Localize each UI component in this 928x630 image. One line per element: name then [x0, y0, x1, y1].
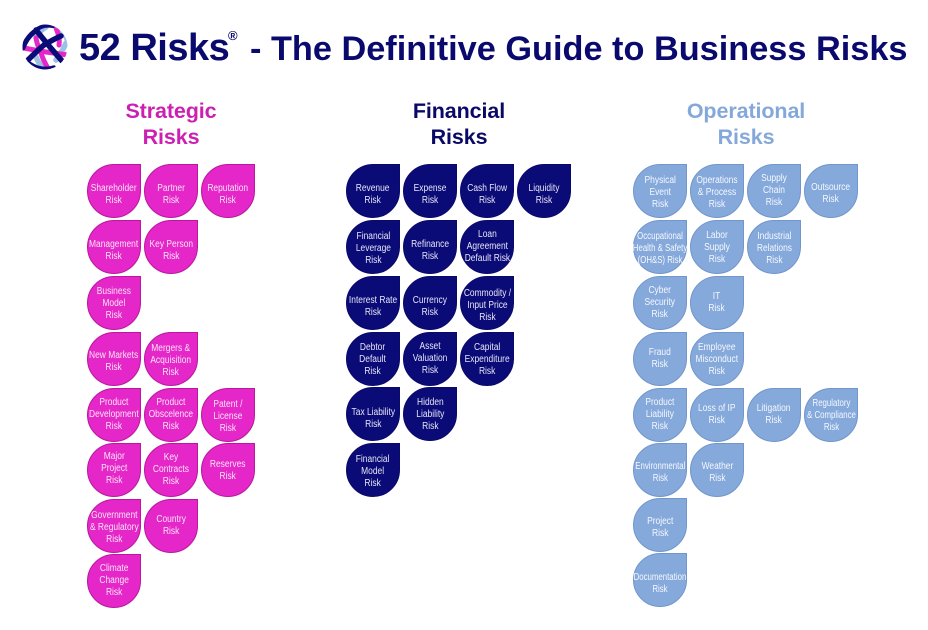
risk: Labor Supply: Labor: [706, 230, 728, 241]
risk: Cyber Security: Cyber: [649, 285, 671, 296]
risk: Loan Agreement Default: Loan: [478, 229, 496, 240]
risk: Commodity / Input Price: [460, 276, 514, 330]
risk: Reputation: Risk: [220, 195, 236, 206]
risk: Financial Leverage: [346, 220, 400, 274]
heading: financial risks: Financial: [413, 99, 505, 123]
risk: Debtor Default: Default: [360, 354, 386, 365]
risk: Project: [633, 498, 687, 552]
panel: strategic risks: [87, 99, 255, 608]
risk: Supply Chain: [747, 164, 801, 218]
risk: Occupational Health and Safety: Occupational: [637, 231, 683, 242]
risk: Employee Misconduct: [690, 332, 744, 386]
heading: strategic risks: Risks: [143, 125, 199, 149]
risk: Patent / License: Patent /: [213, 399, 243, 410]
risk: Loss of IP: Risk: [709, 415, 725, 426]
risk: Industrial Relations: [747, 220, 801, 274]
risk: Product Obscelence: Risk: [163, 421, 179, 432]
risk: Cash Flow: [460, 164, 514, 218]
risk: Liquidity: Risk: [536, 195, 552, 206]
risk: Currency: Risk: [422, 307, 438, 318]
risk: IT: [690, 276, 744, 330]
risk: Loss of IP: [690, 388, 744, 442]
risk: Asset Valuation: Valuation: [413, 353, 447, 364]
risk: Regulatory and Compliance: & Compliance: [807, 410, 855, 421]
risk: Climate Change: Risk: [106, 587, 122, 598]
risk: Product Obscelence: Obscelence: [149, 409, 193, 420]
risk: IT: IT: [713, 291, 721, 302]
risk: Key Contracts: Key: [164, 452, 178, 463]
risk: Revenue: Revenue: [356, 183, 390, 194]
risk: Fraud: [633, 332, 687, 386]
risk: Hidden Liability: Hidden: [417, 397, 443, 408]
risk: Operations and Process: [690, 164, 744, 218]
risk: Product Development: Product: [99, 397, 129, 408]
risk: New Markets: [87, 332, 141, 386]
risk: Financial Leverage: Financial: [356, 231, 390, 242]
risk: Physical Event: Event: [649, 187, 671, 198]
risk: Management: Risk: [106, 251, 122, 262]
risk: Business Model: [87, 276, 141, 330]
risk: Interest Rate: Interest Rate: [349, 295, 397, 306]
risk: Outsource: Risk: [823, 194, 839, 205]
risk: Expense: [403, 164, 457, 218]
risk: Partner: Risk: [163, 195, 179, 206]
risk: Product Liability: Liability: [646, 409, 674, 420]
risk: Labor Supply: Risk: [709, 254, 725, 265]
title: ®: [228, 28, 238, 43]
risk: Loss of IP: Loss of IP: [698, 403, 736, 414]
risk: Asset Valuation: [403, 332, 457, 386]
risk: Physical Event: Risk: [652, 199, 668, 210]
risk: Capital Expenditure: Risk: [479, 366, 495, 377]
risk: Environmental: Environmental: [635, 461, 685, 472]
risk: Litigation: Litigation: [757, 403, 791, 414]
logo: 52 Risks globe: [22, 24, 68, 70]
risk: Environmental: Risk: [652, 473, 668, 484]
risk: Commodity / Input Price: Commodity /: [463, 288, 511, 299]
risk: Reputation: [201, 164, 255, 218]
risk: Commodity / Input Price: Input Price: [467, 300, 507, 311]
risk: Liquidity: Liquidity: [529, 183, 559, 194]
risk: Key Person: Key Person: [149, 239, 193, 250]
risk: Industrial Relations: Risk: [766, 255, 782, 266]
risk: Management: Management: [89, 239, 139, 250]
panel: financial risks: [346, 99, 571, 497]
risk: Cyber Security: [633, 276, 687, 330]
risk: Product Obscelence: Product: [156, 397, 186, 408]
heading: strategic risks: Strategic: [125, 99, 217, 123]
risk: Refinance: [403, 220, 457, 274]
risk: Currency: [403, 276, 457, 330]
risk: Government and Regulatory: [87, 499, 141, 553]
risk: IT: Risk: [709, 303, 725, 314]
heading: operational risks: [687, 99, 805, 149]
risk: Country: Country: [156, 514, 186, 525]
risk: Operations and Process: Operations: [696, 175, 738, 186]
risk: Outsource: [804, 164, 858, 218]
risk: Shareholder: Shareholder: [91, 183, 137, 194]
risk: Debtor Default: [346, 332, 400, 386]
risk: Capital Expenditure: Expenditure: [465, 354, 509, 365]
heading: financial risks: [413, 99, 505, 149]
risk: Mergers and Acquisition: Risk: [163, 367, 179, 378]
risk: Mergers and Acquisition: [144, 332, 198, 386]
risk: Government and Regulatory: Government: [91, 510, 137, 521]
risk: Project: Risk: [652, 528, 668, 539]
risk: Capital Expenditure: Capital: [474, 342, 500, 353]
risk: Asset Valuation: Risk: [422, 365, 438, 376]
risk: Key Contracts: Risk: [163, 476, 179, 487]
risk: Product Development: [87, 388, 141, 442]
risk: Reserves: [201, 443, 255, 497]
risk: Business Model: Model: [103, 298, 125, 309]
heading: financial risks: Risks: [431, 125, 487, 149]
risk: Key Person: [144, 220, 198, 274]
risk: Cash Flow: Cash Flow: [467, 183, 507, 194]
risk: Product Development: Development: [89, 409, 139, 420]
risk: Government and Regulatory: Risk: [106, 534, 122, 545]
risk: Financial Model: Risk: [365, 478, 381, 489]
risk: Business Model: Risk: [106, 310, 122, 321]
risk: Fraud: Fraud: [649, 347, 671, 358]
risk: Interest Rate: Risk: [365, 307, 381, 318]
risk: Supply Chain: Chain: [763, 185, 785, 196]
risk: Commodity / Input Price: Risk: [479, 312, 495, 323]
risk: Debtor Default: Debtor: [360, 342, 386, 353]
risk: Occupational Health and Safety: (OH&S) Risk: [638, 255, 682, 266]
risk: Fraud: Risk: [652, 359, 668, 370]
risk: Operations and Process: & Process: [698, 187, 736, 198]
risk: Supply Chain: Risk: [766, 197, 782, 208]
risk: Major Project: [87, 443, 141, 497]
risk: Liquidity: [517, 164, 571, 218]
risk: Weather: Risk: [709, 473, 725, 484]
risk: Cash Flow: Risk: [479, 195, 495, 206]
risk: Employee Misconduct: Risk: [709, 366, 725, 377]
risk: Environmental: [633, 443, 687, 497]
risk: Labor Supply: [690, 220, 744, 274]
risk: Debtor Default: Risk: [365, 366, 381, 377]
risk: Expense: Expense: [414, 183, 446, 194]
risk: Hidden Liability: Liability: [416, 409, 444, 420]
risk: Regulatory and Compliance: Risk: [823, 422, 839, 433]
risk: Loan Agreement Default: [460, 220, 514, 274]
risk: Patent / License: License: [213, 411, 243, 422]
risk: Litigation: [747, 388, 801, 442]
risk: Reserves: Reserves: [210, 459, 246, 470]
risk: Major Project: Risk: [106, 475, 122, 486]
risk: Operations and Process: Risk: [709, 199, 725, 210]
risk: Physical Event: [633, 164, 687, 218]
risk: Labor Supply: Supply: [704, 242, 730, 253]
risk: Management: [87, 220, 141, 274]
risk: Weather: Weather: [701, 461, 733, 472]
risk: Business Model: Business: [97, 286, 131, 297]
risk: Weather: [690, 443, 744, 497]
risk: Product Liability: [633, 388, 687, 442]
risk: Capital Expenditure: [460, 332, 514, 386]
risk: Loan Agreement Default: Agreement: [466, 241, 508, 252]
heading: strategic risks: [125, 99, 217, 149]
risk: Occupational Health and Safety: Health & Safety: [633, 243, 687, 254]
risk: Documentation: [633, 553, 687, 607]
risk: Key Person: Risk: [163, 251, 179, 262]
title: - The Definitive Guide to Business Risks: [250, 30, 908, 68]
risk: Revenue: [346, 164, 400, 218]
risk: Tax Liability: [346, 387, 400, 441]
risk: Physical Event: Physical: [644, 175, 676, 186]
risk: Regulatory and Compliance: Regulatory: [812, 398, 850, 409]
risk: Patent / License: Risk: [220, 423, 236, 434]
risk: Financial Model: [346, 443, 400, 497]
risk: Climate Change: [87, 554, 141, 608]
risk: Loan Agreement Default: Default Risk: [464, 253, 510, 264]
risk: Shareholder: [87, 164, 141, 218]
risk: Financial Model: Model: [362, 466, 384, 477]
risk: Project: Project: [647, 516, 673, 527]
risk: Employee Misconduct: Employee: [698, 342, 736, 353]
risk: Key Contracts: [144, 443, 198, 497]
risk: Outsource: Outsource: [812, 182, 850, 193]
risk: Country: [144, 499, 198, 553]
risk: Litigation: Risk: [766, 415, 782, 426]
risk: Key Contracts: Contracts: [153, 464, 189, 475]
risk: Product Liability: Product: [645, 397, 675, 408]
risk: New Markets: Risk: [106, 362, 122, 373]
panel: operational risks: [633, 99, 858, 607]
risk: Climate Change: Change: [99, 575, 129, 586]
risk: Product Liability: Risk: [652, 421, 668, 432]
risk: Regulatory and Compliance: [804, 388, 858, 442]
risk: Mergers and Acquisition: Acquisition: [151, 355, 191, 366]
risk: Refinance: Risk: [422, 251, 438, 262]
risk: Employee Misconduct: Misconduct: [696, 354, 738, 365]
risk: Tax Liability: Risk: [365, 419, 381, 430]
risk: Partner: [144, 164, 198, 218]
risk: Partner: Partner: [157, 183, 185, 194]
risk: Major Project: Major: [103, 451, 125, 462]
risk: New Markets: New Markets: [89, 350, 139, 361]
risk: Expense: Risk: [422, 195, 438, 206]
risk: Mergers and Acquisition: Mergers &: [152, 343, 190, 354]
risk: Cyber Security: Security: [645, 297, 675, 308]
risk: Tax Liability: Tax Liability: [351, 407, 395, 418]
risk: Refinance: Refinance: [411, 239, 449, 250]
risk: Financial Leverage: Risk: [365, 255, 381, 266]
risk: Climate Change: Climate: [100, 563, 128, 574]
heading: operational risks: Operational: [687, 99, 805, 123]
risk: Major Project: Project: [101, 463, 127, 474]
risk: Currency: Currency: [413, 295, 447, 306]
risk: Product Development: Risk: [106, 421, 122, 432]
heading: operational risks: Risks: [718, 125, 774, 149]
risk: Patent / License: [201, 388, 255, 442]
risk: Revenue: Risk: [365, 195, 381, 206]
risk: Shareholder: Risk: [106, 195, 122, 206]
risk: Country: Risk: [163, 526, 179, 537]
risk: Hidden Liability: Risk: [422, 421, 438, 432]
risk: Documentation: Risk: [652, 584, 668, 595]
risk: Government and Regulatory: & Regulatory: [90, 522, 138, 533]
risk: Reputation: Reputation: [208, 183, 248, 194]
risk: Product Obscelence: [144, 388, 198, 442]
risk: Hidden Liability: [403, 387, 457, 441]
risk: Cyber Security: Risk: [652, 309, 668, 320]
risk: Reserves: Risk: [220, 471, 236, 482]
risk: Supply Chain: Supply: [761, 173, 787, 184]
risk: Financial Leverage: Leverage: [355, 243, 391, 254]
risk: Occupational Health and Safety: [633, 220, 687, 274]
title: 52 Risks: [79, 27, 229, 69]
risk: Industrial Relations: Relations: [756, 243, 792, 254]
risk: Financial Model: Financial: [356, 454, 390, 465]
risk: Industrial Relations: Industrial: [757, 231, 791, 242]
risk: Documentation: Documentation: [634, 572, 686, 583]
risk: Interest Rate: [346, 276, 400, 330]
risk: Asset Valuation: Asset: [419, 341, 441, 352]
